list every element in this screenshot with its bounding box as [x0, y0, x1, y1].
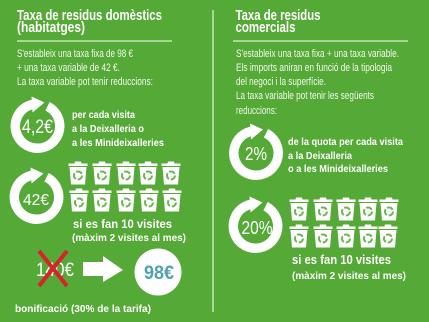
- text block: household tax description: La taxa variable pot tenir reduccions:: [17, 76, 153, 88]
- panel: commercial waste tax: [233, 8, 408, 282]
- text block: ten visits condition: (màxim 2 visites al mes): [72, 232, 186, 244]
- text block: per visit reduction: a les Minideixalleries: [72, 137, 164, 149]
- text block: household tax description: S'estableix una taxa fixa de 98 €: [17, 48, 133, 60]
- heading: household waste tax: [17, 8, 162, 36]
- final price circle 98€: [134, 248, 182, 296]
- text block: per visit reduction: [72, 109, 164, 149]
- crossed out price 140€: 140€: [36, 260, 74, 281]
- icon: 4,2€ circular arrow: 4,2€: [22, 117, 53, 138]
- heading: household waste tax: Taxa de residus domèstics: [17, 8, 162, 24]
- text block: per visit quota reduction: o a les Minideixalleries: [288, 163, 388, 175]
- icon: 42€ circular arrow: 42€: [23, 192, 49, 209]
- heading: household waste tax: (habitatges): [17, 20, 85, 36]
- heading: commercial waste tax: comercials: [236, 20, 296, 36]
- crossed out price 140€: [36, 251, 74, 286]
- text block: per visit reduction: per cada visita: [72, 109, 135, 121]
- text block: household tax description: [17, 48, 153, 88]
- icon: 42€ circular arrow: [14, 168, 59, 219]
- panel: household waste tax: [14, 8, 186, 315]
- text block: ten visits condition: (màxim 2 visites al mes): [292, 270, 406, 282]
- text block: per visit quota reduction: [288, 136, 403, 175]
- arrow: price reduction: [83, 256, 123, 282]
- icon: 20% circular arrow: 20%: [242, 218, 272, 238]
- heading: commercial waste tax: Taxa de residus: [236, 8, 320, 24]
- heading: commercial waste tax: [236, 8, 320, 36]
- icon: 2% circular arrow: [234, 124, 278, 175]
- icon: 4,2€ circular arrow: [15, 96, 60, 148]
- icon: 2% circular arrow: 2%: [245, 144, 267, 164]
- icon group: ten recycling bins: [290, 198, 398, 248]
- icon group: ten recycling bins: [68, 162, 182, 212]
- text block: ten visits condition: [72, 217, 186, 244]
- text block: commercial tax description: La taxa variable pot tenir les següents: [236, 90, 374, 102]
- text block: ten visits condition: [292, 253, 406, 282]
- text block: household tax description: + una taxa variable de 42 €.: [17, 62, 120, 74]
- text block: bonus: bonificació (30% de la tarifa): [15, 303, 151, 315]
- final price circle 98€: 98€: [144, 263, 174, 284]
- text block: ten visits condition: si es fan 10 visites: [292, 253, 391, 267]
- text block: per visit reduction: a la Deixalleria o: [72, 123, 144, 135]
- icon: 20% circular arrow: [233, 196, 278, 248]
- text block: commercial tax description: reduccions:: [236, 105, 277, 117]
- text block: commercial tax description: del negoci i la superfície.: [236, 76, 326, 88]
- text block: per visit quota reduction: de la quota per cada visita: [288, 136, 403, 148]
- text block: ten visits condition: si es fan 10 visites: [73, 217, 172, 231]
- text block: per visit quota reduction: a la Deixalleria: [288, 150, 352, 162]
- text block: commercial tax description: [236, 48, 399, 117]
